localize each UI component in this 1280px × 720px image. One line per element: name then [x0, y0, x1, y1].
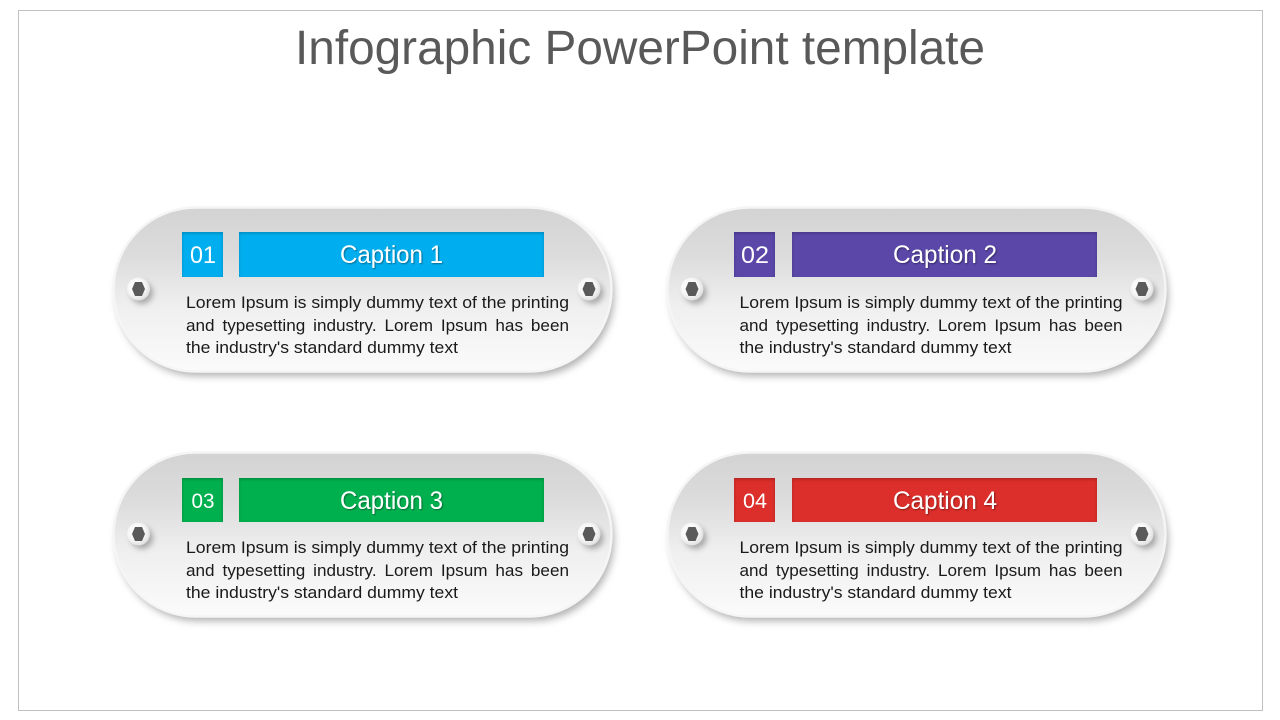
number badge 02: 02: [741, 242, 769, 269]
caption bar 1: [239, 232, 544, 277]
number badge 03: 03: [192, 490, 214, 513]
number badge 03: [182, 478, 223, 522]
body text 3: the industry's standard dummy text: [186, 584, 458, 602]
body text 3: [186, 539, 569, 602]
screw: left: [680, 522, 706, 549]
body text 3: and typesetting industry. Lorem Ipsum has been: [186, 562, 569, 580]
body text 4: the industry's standard dummy text: [740, 584, 1012, 602]
screw: left: [680, 278, 706, 304]
number badge 04: [734, 478, 775, 522]
screw: right: [578, 522, 604, 549]
caption bar 3: [239, 478, 544, 522]
panel: caption 1: [114, 208, 614, 376]
title: Infographic PowerPoint template: [295, 22, 985, 75]
body text 3: Lorem Ipsum is simply dummy text of the printing: [186, 539, 569, 557]
caption bar 4: [792, 478, 1097, 522]
caption bar 1: Caption 1: [340, 241, 443, 269]
screw: right: [1130, 278, 1156, 304]
number badge 04: 04: [743, 490, 767, 513]
panel: caption 2: [668, 208, 1168, 376]
caption bar 2: [792, 232, 1097, 277]
number badge 01: 01: [190, 242, 216, 269]
body text 1: [186, 294, 569, 357]
body text 2: and typesetting industry. Lorem Ipsum has been: [740, 317, 1122, 335]
body text 4: and typesetting industry. Lorem Ipsum has been: [740, 562, 1122, 580]
number badge 01: [182, 232, 223, 277]
body text 4: Lorem Ipsum is simply dummy text of the printing: [740, 539, 1122, 557]
number badge 02: [734, 232, 775, 277]
screw: left: [127, 522, 153, 549]
body text 1: Lorem Ipsum is simply dummy text of the printing: [186, 294, 569, 312]
panel: caption 4: [668, 452, 1168, 621]
body text 2: Lorem Ipsum is simply dummy text of the printing: [740, 294, 1122, 312]
body text 4: [740, 539, 1122, 602]
screw: right: [578, 278, 604, 304]
panel: caption 3: [114, 452, 614, 621]
body text 1: the industry's standard dummy text: [186, 339, 458, 357]
body text 1: and typesetting industry. Lorem Ipsum has been: [186, 317, 569, 335]
screw: right: [1130, 522, 1156, 549]
caption bar 3: Caption 3: [340, 487, 443, 515]
caption bar 2: Caption 2: [893, 241, 997, 269]
body text 2: [740, 294, 1122, 357]
screw: left: [127, 278, 153, 304]
body text 2: the industry's standard dummy text: [740, 339, 1012, 357]
caption bar 4: Caption 4: [893, 487, 997, 515]
